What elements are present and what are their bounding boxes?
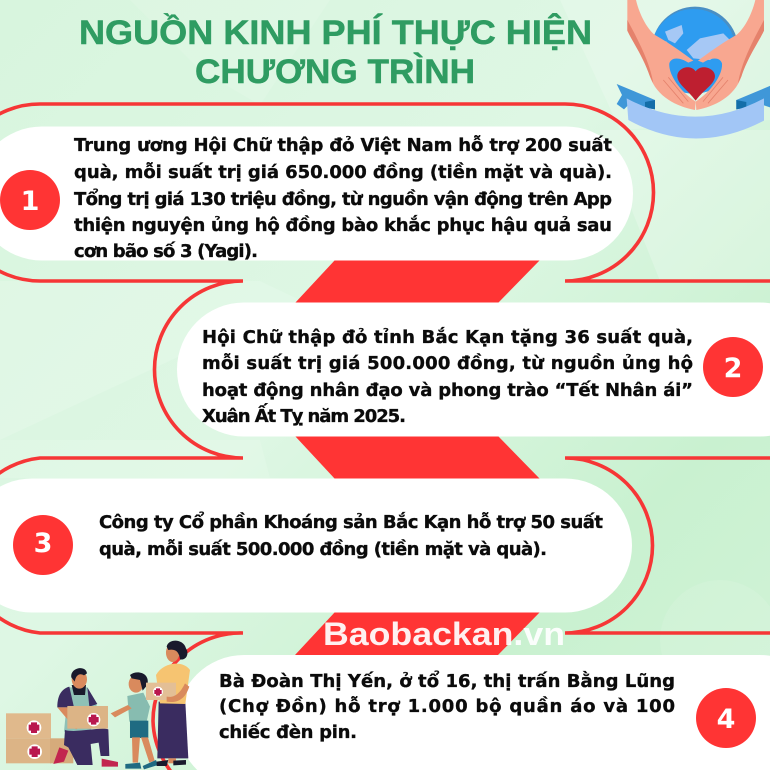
text block 1: quà, mỗi suất trị giá 650.000 đồng (tiền mặt và quà). xyxy=(74,161,612,183)
number badge 2 xyxy=(703,337,763,397)
illustration: volunteers with relief boxes xyxy=(6,641,190,769)
red connector band 2-3 xyxy=(295,436,540,479)
text block 3 xyxy=(99,511,603,560)
text block 3: quà, mỗi suất 500.000 đồng (tiền mặt và quà). xyxy=(99,538,547,560)
number badge 1: 1 xyxy=(21,186,39,217)
text block 2: Hội Chữ thập đỏ tỉnh Bắc Kạn tặng 36 suất quà, xyxy=(202,327,693,348)
number badge 1 xyxy=(0,170,60,230)
text block 2 xyxy=(202,327,693,427)
red connector band 3-4 xyxy=(295,612,540,655)
text block 4 xyxy=(219,670,675,743)
panel 4 xyxy=(177,655,770,770)
boxes xyxy=(6,713,73,763)
text block 3: Công ty Cổ phần Khoáng sản Bắc Kạn hỗ trợ 50 suất xyxy=(99,511,603,533)
number badge 2: 2 xyxy=(724,353,742,384)
watermark: Baobackan.vn xyxy=(323,616,565,652)
child xyxy=(111,672,158,769)
text block 1: thiện nguyện ủng hộ đồng bào khắc phục hậu quả sau xyxy=(74,215,612,236)
text block 4: (Chợ Đồn) hỗ trợ 1.000 bộ quần áo và 100 xyxy=(219,695,675,717)
panel 2 xyxy=(177,302,770,436)
panel 1 xyxy=(0,126,633,262)
text block 4: chiếc đèn pin. xyxy=(219,722,357,743)
red connector band 1-2 xyxy=(295,260,540,303)
text block 1: Trung ương Hội Chữ thập đỏ Việt Nam hỗ trợ 200 suất xyxy=(74,134,612,156)
text block 2: hoạt động nhân đạo và phong trào “Tết Nhân ái” xyxy=(202,380,693,401)
number badge 3 xyxy=(13,515,73,575)
man kneeling xyxy=(53,668,118,767)
title: CHƯƠNG TRÌNH xyxy=(195,53,475,91)
text block 4: Bà Đoàn Thị Yến, ở tổ 16, thị trấn Bằng Lũng xyxy=(219,670,675,692)
text block 1: Tổng trị giá 130 triệu đồng, từ nguồn vận động trên App xyxy=(74,188,612,210)
title: NGUỒN KINH PHÍ THỰC HIỆN xyxy=(79,14,592,52)
woman xyxy=(146,641,190,766)
number badge 3: 3 xyxy=(34,528,52,559)
text block 2: mỗi suất trị giá 500.000 đồng, từ nguồn ủng hộ xyxy=(202,352,693,374)
text block 2: Xuân Ất Tỵ năm 2025. xyxy=(202,403,406,427)
panel 3 xyxy=(0,478,632,612)
text block 1: cơn bão số 3 (Yagi). xyxy=(74,241,258,262)
text block 1 xyxy=(74,134,612,262)
number badge 4 xyxy=(696,688,756,748)
icon: hands forming heart around globe with ribbon xyxy=(617,0,770,138)
title xyxy=(79,14,592,91)
number badge 4: 4 xyxy=(717,704,735,735)
